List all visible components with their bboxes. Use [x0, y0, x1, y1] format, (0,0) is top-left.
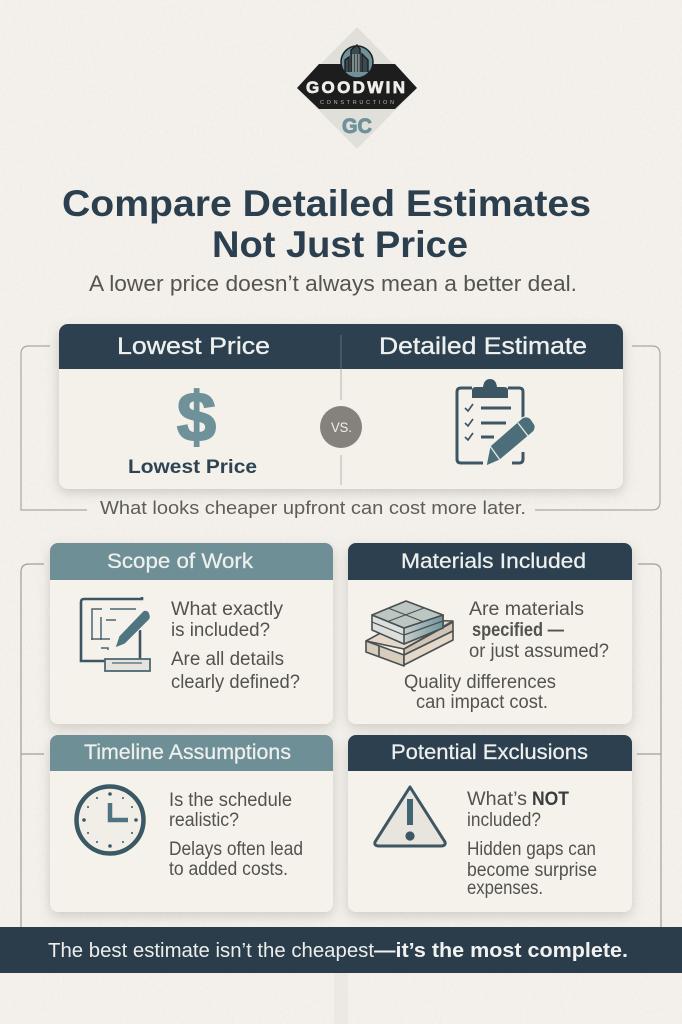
label: lowest price: Lowest Price	[128, 457, 257, 478]
icon: dollar sign: $	[177, 378, 216, 456]
panel: potential exclusions	[348, 735, 632, 916]
vs badge: VS.	[331, 419, 352, 435]
text: materials questions: specified —	[472, 620, 564, 641]
comparison header	[59, 324, 623, 369]
text: exclusions questions: Hidden gaps can	[467, 839, 596, 860]
logo: Goodwin Construction: GOODWIN	[306, 78, 405, 97]
banner: bottom takeaway: —it’s the most complete.	[374, 940, 628, 962]
text: exclusions questions	[467, 789, 597, 899]
comparison header: Detailed Estimate	[379, 333, 587, 360]
text: timeline questions: Is the schedule	[169, 790, 292, 811]
header: potential exclusions: Potential Exclusions	[391, 741, 588, 764]
text: scope questions: Are all details	[171, 649, 284, 670]
icon: clipboard and pencil	[457, 379, 535, 466]
header: scope of work	[50, 543, 333, 580]
bracket: comparison	[21, 346, 660, 510]
header: timeline assumptions: Timeline Assumptions	[84, 741, 291, 764]
comparison header: Lowest Price	[117, 333, 270, 360]
text: exclusions questions: What’s	[467, 789, 527, 810]
logo: Goodwin Construction: CONSTRUCTION	[320, 100, 394, 106]
title: Compare Detailed Estimates	[62, 183, 591, 224]
subtitle: A lower price doesn’t always mean a better deal.	[89, 271, 577, 296]
text: exclusions questions: expenses.	[467, 878, 543, 899]
logo: Goodwin Construction: GC	[342, 115, 372, 138]
text: scope questions: is included?	[171, 620, 270, 641]
header: scope of work: Scope of Work	[107, 550, 254, 573]
icon: warning triangle	[375, 787, 445, 846]
icon: stacked materials on pallet	[366, 601, 453, 666]
panel: materials included	[348, 543, 632, 728]
banner: bottom takeaway	[0, 927, 682, 973]
icon: blueprint and pencil	[81, 597, 150, 671]
title: Not Just Price	[212, 224, 468, 265]
text: materials questions	[404, 599, 609, 713]
text: materials questions: Are materials	[469, 599, 584, 620]
text: timeline questions: to added costs.	[169, 859, 288, 880]
text: timeline questions: Delays often lead	[169, 839, 303, 860]
header: materials included: Materials Included	[401, 550, 586, 573]
header: timeline assumptions	[50, 735, 333, 771]
caption: cheaper upfront: What looks cheaper upfront can cost more later.	[100, 498, 526, 518]
text: materials questions: Quality differences	[404, 672, 556, 693]
panel: comparison	[59, 324, 623, 492]
text: timeline questions	[169, 790, 303, 880]
title	[62, 183, 591, 265]
text: scope questions	[171, 599, 300, 693]
text: scope questions: What exactly	[171, 599, 284, 620]
banner: bottom takeaway: The best estimate isn’t the cheapest	[48, 940, 374, 962]
text: timeline questions: realistic?	[169, 810, 239, 831]
text: exclusions questions: included?	[467, 810, 541, 831]
vs badge	[320, 406, 362, 448]
text: exclusions questions: NOT	[532, 789, 569, 810]
panel: scope of work	[50, 543, 333, 728]
logo: Goodwin Construction	[297, 27, 417, 149]
text: exclusions questions: become surprise	[467, 860, 597, 881]
panel: timeline assumptions	[50, 735, 333, 916]
bracket: four factors	[21, 564, 661, 927]
icon: clock	[76, 786, 144, 854]
header: materials included	[348, 543, 632, 580]
text: materials questions: can impact cost.	[416, 692, 548, 713]
text: scope questions: clearly defined?	[171, 672, 300, 693]
text: materials questions: or just assumed?	[469, 641, 609, 662]
header: potential exclusions	[348, 735, 632, 771]
